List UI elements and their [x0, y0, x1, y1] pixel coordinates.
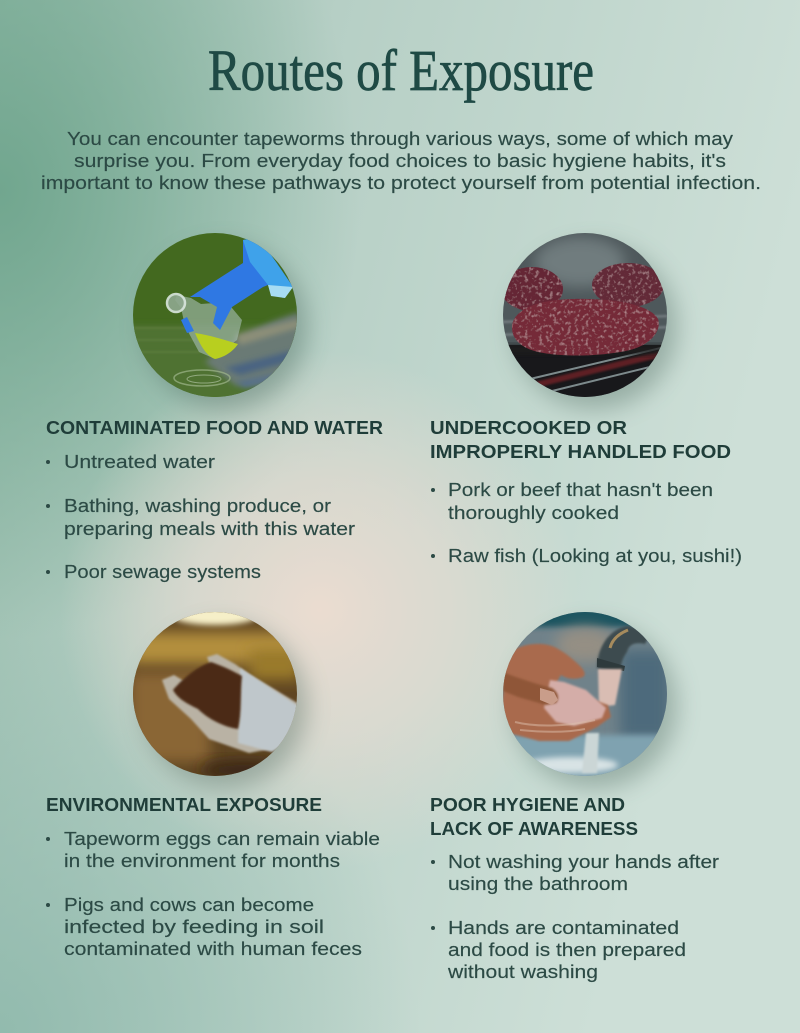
heading: LACK OF AWARENESS: [430, 819, 638, 839]
bullet list: Hands are contaminated: [448, 918, 679, 938]
intro text: [41, 129, 761, 193]
bullet list: Tapeworm eggs can remain viable: [64, 829, 380, 849]
image: gloved hand holding soil: [130, 607, 307, 788]
bullet list: thoroughly cooked: [448, 503, 619, 523]
bullet list: and food is then prepared: [448, 940, 686, 960]
bullet list: [46, 829, 380, 959]
bullet list: using the bathroom: [448, 874, 628, 894]
bullet list: Poor sewage systems: [64, 562, 261, 582]
bullet list: preparing meals with this water: [64, 519, 355, 539]
image: hands washing under tap: [500, 605, 677, 788]
heading: [430, 795, 638, 839]
intro text: surprise you. From everyday food choices to basic hygiene habits, it's: [74, 151, 726, 171]
heading: IMPROPERLY HANDLED FOOD: [430, 442, 731, 462]
image: burger patties on a grill: [500, 230, 677, 409]
panel: undercooked food: [430, 230, 742, 566]
heading: CONTAMINATED FOOD AND WATER: [46, 418, 383, 438]
bullet list: contaminated with human feces: [64, 939, 362, 959]
bullet list: Bathing, washing produce, or: [64, 496, 331, 516]
bullet list: in the environment for months: [64, 851, 340, 871]
intro text: You can encounter tapeworms through various ways, some of which may: [67, 129, 733, 149]
image: gloved hand with flask over water: [130, 230, 307, 409]
heading: POOR HYGIENE AND: [430, 795, 625, 815]
intro text: important to know these pathways to protect yourself from potential infection.: [41, 173, 761, 193]
heading: ENVIRONMENTAL EXPOSURE: [46, 795, 322, 815]
bullet list: Pork or beef that hasn't been: [448, 480, 713, 500]
bullet list: without washing: [447, 962, 598, 982]
heading: [430, 418, 731, 462]
bullet list: Raw fish (Looking at you, sushi!): [448, 546, 742, 566]
bullet list: Pigs and cows can become: [64, 895, 314, 915]
heading: UNDERCOOKED OR: [430, 418, 627, 438]
panel: contaminated food and water: [46, 230, 383, 582]
title: Routes of Exposure: [208, 38, 594, 103]
bullet list: Untreated water: [64, 452, 215, 472]
panel: environmental exposure: [46, 607, 380, 959]
bullet list: infected by feeding in soil: [64, 917, 324, 937]
bullet list: [431, 480, 742, 566]
bullet list: [46, 452, 355, 582]
bullet list: Not washing your hands after: [448, 852, 719, 872]
bullet list: [431, 852, 719, 982]
panel: poor hygiene: [430, 605, 719, 982]
